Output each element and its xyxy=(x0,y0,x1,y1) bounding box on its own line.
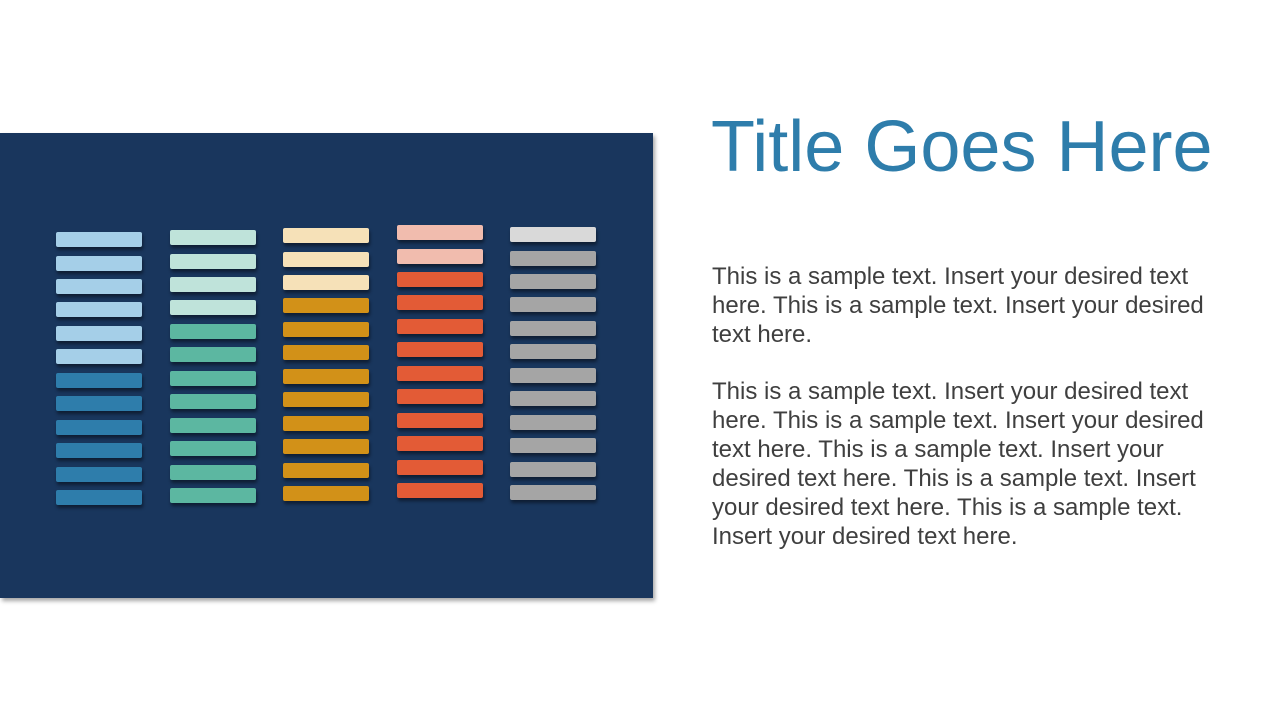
column 4: orange bars xyxy=(396,225,486,502)
column 5: grey bars xyxy=(510,227,598,504)
text block 2: This is a sample text. Insert your desired text here. This is a sample text. Insert your desired text here. This is a sample text. Insert your desired text here. This is a sample text. Insert your desired text here. This is a sample text. Insert your desired text here. xyxy=(712,378,1204,550)
text block 1: This is a sample text. Insert your desired text here. This is a sample text. Insert your desired text here. xyxy=(712,263,1204,348)
title: Title Goes Here xyxy=(711,107,1213,187)
column 1: blue bars xyxy=(56,232,144,510)
panel: dark blue bar chart background xyxy=(0,133,653,598)
column 2: teal bars xyxy=(170,230,258,508)
column 3: gold bars xyxy=(282,228,372,506)
